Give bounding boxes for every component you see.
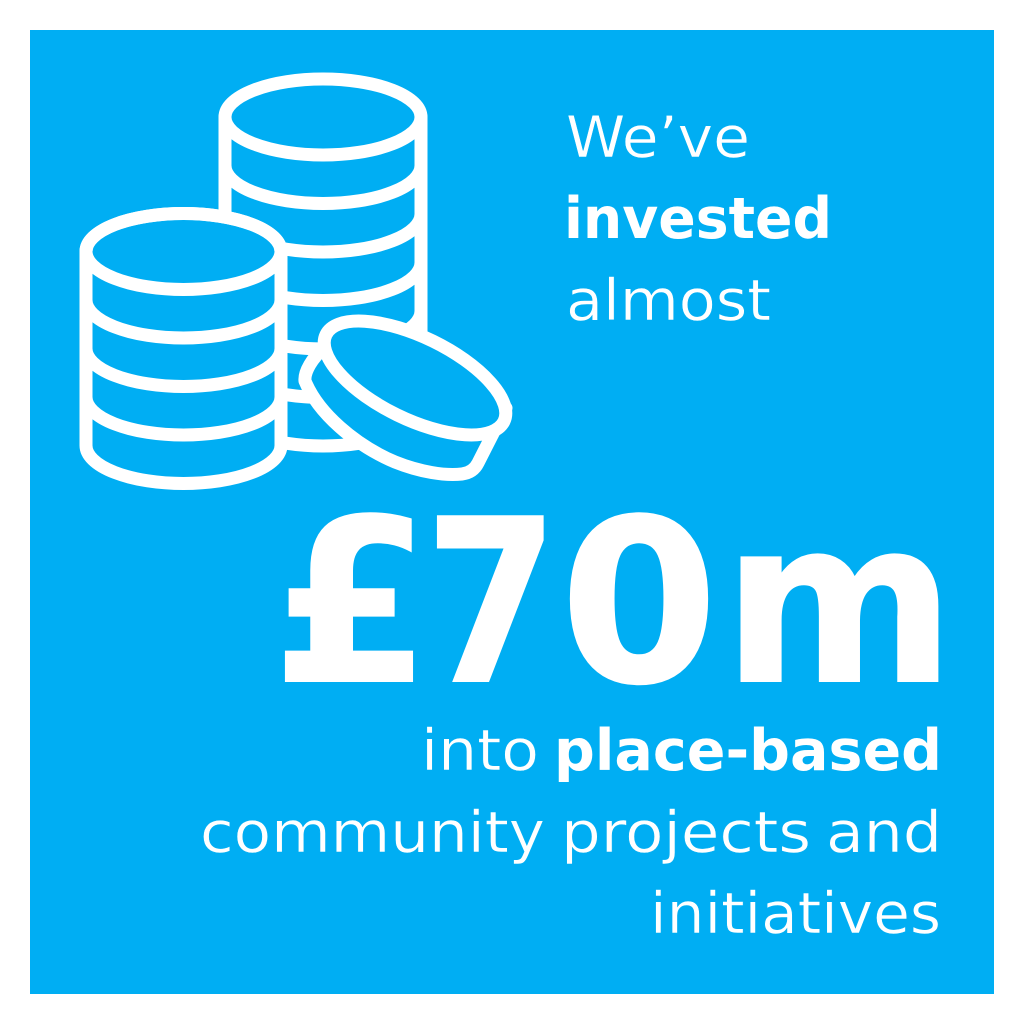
text: We've: We’ve — [566, 105, 750, 171]
big figure: £70m: 7 — [425, 472, 558, 735]
icon: stacks of coins — [86, 79, 522, 484]
text: community: community — [200, 800, 545, 866]
text: projects: projects — [561, 800, 811, 866]
text: almost: almost — [566, 268, 771, 334]
text: place-based: place-based — [554, 718, 942, 784]
big figure: £70m: 0 — [560, 472, 718, 735]
icon: single tilted coin — [305, 298, 522, 474]
text: initiatives: initiatives — [650, 881, 941, 947]
big figure: £70m: £ — [272, 472, 431, 735]
icon: short left coin stack — [86, 214, 281, 484]
icon: tall right coin stack — [225, 79, 421, 446]
big figure: £70m — [272, 472, 955, 735]
big figure: £70m: m — [723, 472, 955, 735]
text block: closing lines — [200, 718, 942, 947]
text block: intro lines — [564, 105, 832, 334]
text: invested: invested — [564, 186, 832, 252]
text: into: into — [421, 718, 539, 784]
text: and: and — [826, 800, 942, 866]
